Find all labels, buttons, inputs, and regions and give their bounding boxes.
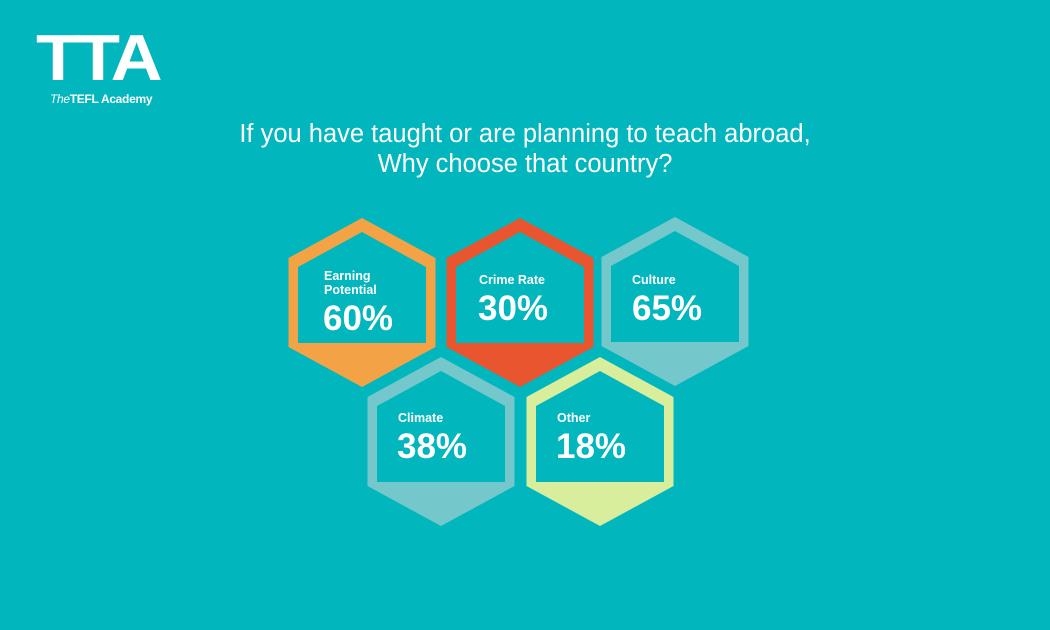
- hexagon: crime rate: 30%: [478, 289, 548, 328]
- hexagon: earning potential: 60%: [323, 299, 393, 338]
- title: If you have taught or are planning to teach abroad,: [239, 120, 811, 148]
- hexagon: climate: Climate: [398, 411, 443, 425]
- hexagon: crime rate: Crime Rate: [479, 273, 545, 287]
- title: Why choose that country?: [378, 150, 672, 178]
- hexagon: crime rate: [446, 218, 594, 387]
- hexagon: climate: [368, 357, 514, 526]
- hexagon: culture: [602, 217, 748, 386]
- hexagon: earning potential: Potential: [324, 283, 377, 297]
- logo: TheTEFL Academy: [50, 92, 152, 106]
- hexagon: earning potential: Earning: [324, 269, 371, 283]
- hexagon: earning potential: [288, 218, 436, 387]
- hexagon: other: Other: [557, 411, 590, 425]
- hexagon: other: [526, 357, 674, 526]
- logo: TTA: [36, 22, 159, 94]
- hexagon: culture: Culture: [632, 273, 676, 287]
- title: [239, 120, 811, 178]
- hexagon: culture: 65%: [632, 289, 702, 328]
- hexagon: other: 18%: [556, 427, 626, 466]
- hexagon: climate: 38%: [397, 427, 467, 466]
